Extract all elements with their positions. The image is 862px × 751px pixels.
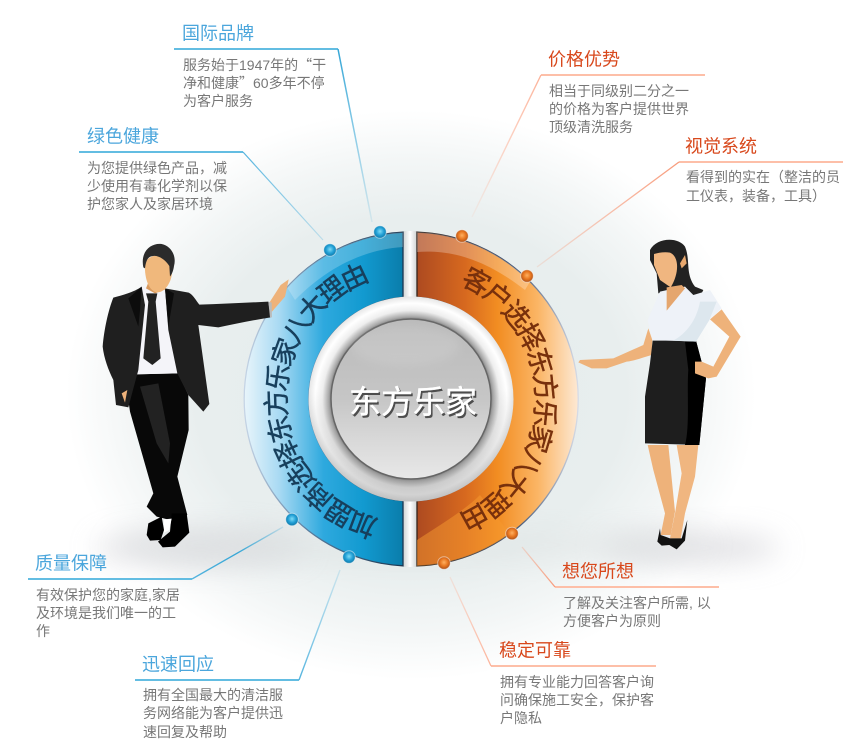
central wheel	[244, 231, 579, 567]
callout: 国际品牌: 为客户服务	[183, 93, 253, 109]
callout: 迅速回应: 速回复及帮助	[143, 724, 227, 740]
callout: 质量保障: 质量保障	[35, 554, 107, 574]
callout: 国际品牌: 净和健康”60多年不停	[183, 73, 325, 93]
callout: 稳定可靠: 拥有专业能力回答客户询	[500, 674, 654, 690]
callout: 稳定可靠: 户隐私	[500, 710, 542, 726]
callout: 绿色健康	[87, 126, 227, 212]
curved label: right: 客户选择东方乐家八大理由	[460, 266, 559, 530]
center button	[331, 319, 491, 479]
callout: 质量保障	[35, 554, 180, 639]
callout: 质量保障: 及环境是我们唯一的工	[36, 605, 176, 621]
callout: 想您所想: 方便客户为原则	[563, 613, 661, 629]
center title: 东方乐家	[349, 384, 477, 420]
callout: 视觉系统: 工仪表，装备，工具）	[686, 186, 826, 206]
figure: businessman	[103, 244, 289, 547]
callout: 绿色健康: 为您提供绿色产品，减	[87, 158, 227, 178]
callout: 视觉系统: 视觉系统	[685, 136, 757, 156]
callout: 质量保障: 有效保护您的家庭,家居	[36, 587, 180, 603]
callout: 绿色健康: 少使用有毒化学剂以保	[87, 178, 227, 194]
panel: orange half ring	[417, 225, 578, 572]
callout: 价格优势: 的价格为客户提供世界	[549, 101, 689, 117]
inner ring	[308, 296, 514, 502]
connector lines	[28, 49, 843, 680]
callout: 想您所想	[562, 562, 711, 629]
callout: 绿色健康: 护您家人及家居环境	[87, 196, 213, 212]
callout: 想您所想: 了解及关注客户所需, 以	[563, 595, 711, 611]
panel: blue half ring	[244, 225, 403, 566]
callout: 视觉系统: 看得到的实在（整洁的员	[686, 167, 840, 187]
callout: 想您所想: 想您所想	[562, 562, 634, 582]
callout: 质量保障: 作	[36, 623, 50, 639]
callout: 视觉系统	[685, 136, 840, 206]
callout: 价格优势: 相当于同级别二分之一	[549, 83, 689, 99]
callout: 迅速回应: 拥有全国最大的清洁服	[143, 687, 283, 703]
callout: 稳定可靠: 问确保施工安全，保护客	[500, 690, 654, 710]
callout: 稳定可靠	[499, 640, 654, 726]
callout: 价格优势	[548, 50, 689, 135]
figure: businesswoman	[578, 240, 741, 549]
callout: 稳定可靠: 稳定可靠	[499, 640, 571, 660]
callout: 迅速回应: 务网络能为客户提供迅	[143, 705, 283, 721]
divider strip	[403, 231, 417, 567]
node dots	[286, 226, 533, 569]
callout: 迅速回应: 迅速回应	[142, 654, 214, 674]
callout: 价格优势: 顶级清洗服务	[549, 119, 633, 135]
callout: 国际品牌: 国际品牌	[182, 24, 254, 44]
callout: 国际品牌: 服务始于1947年的“干	[183, 55, 326, 75]
center title: 东方乐家	[350, 386, 479, 422]
curved label: left: 加盟商选择东方乐家八大理由	[263, 264, 378, 540]
callout: 价格优势: 价格优势	[548, 50, 620, 70]
callout: 国际品牌	[182, 24, 326, 109]
callout: 迅速回应	[142, 654, 283, 740]
callout: 绿色健康: 绿色健康	[87, 126, 159, 146]
